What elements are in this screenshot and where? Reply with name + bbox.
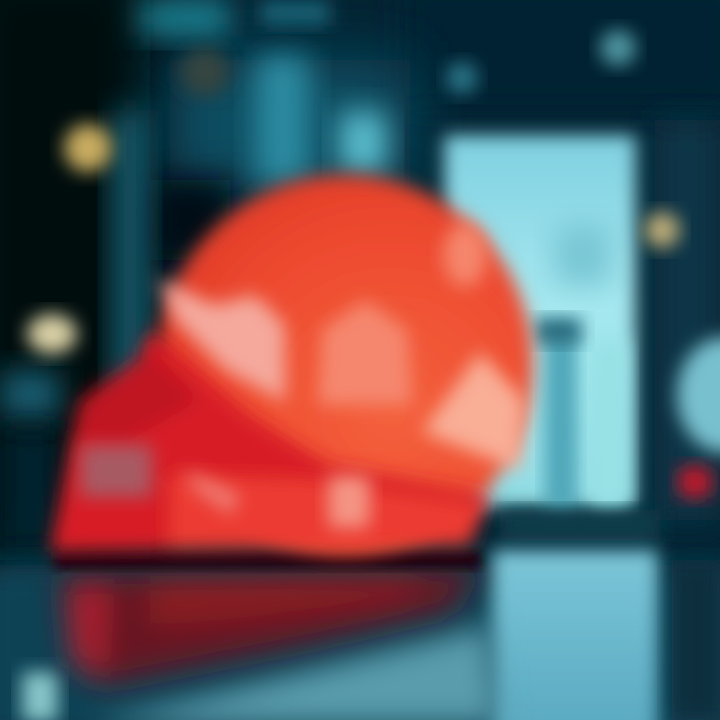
floor: reflective light blue surface (0, 550, 720, 720)
house: red roof and base (50, 330, 490, 552)
highlights: pale panels on the sphere (80, 223, 525, 528)
reflection: dark red mirror of the house (60, 570, 480, 685)
sphere: red globe (157, 175, 533, 555)
bokeh lights: warm and red dots (27, 30, 720, 498)
contact shadow: dark band under the house (55, 552, 480, 568)
window: bright glass wall (444, 135, 660, 540)
